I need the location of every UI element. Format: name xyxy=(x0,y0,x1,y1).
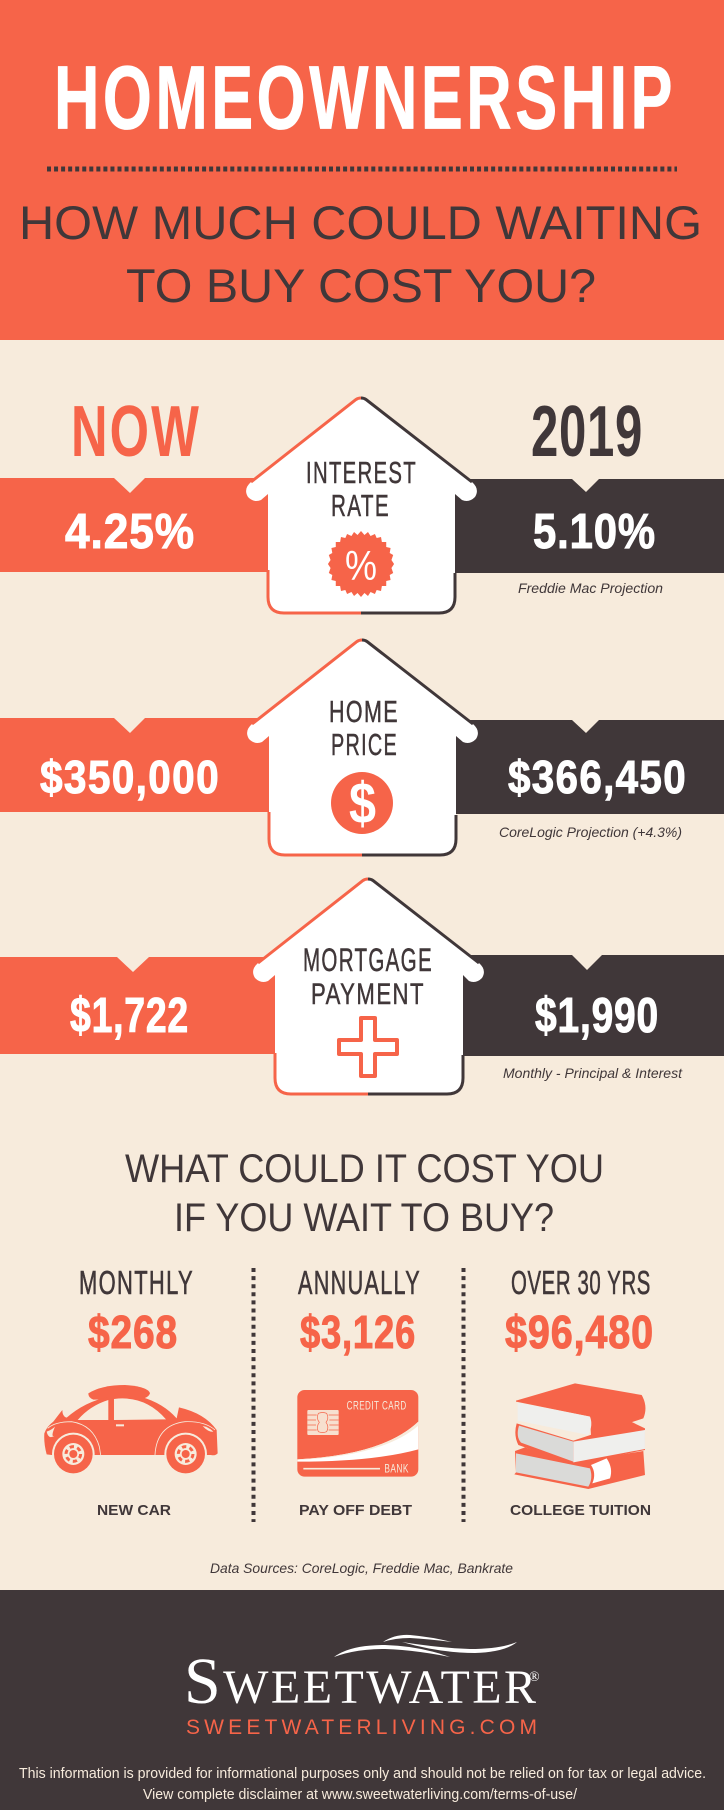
icon: books xyxy=(514,1383,645,1489)
column heading: MONTHLY xyxy=(79,1264,194,1301)
panel: over 30 years column xyxy=(505,1264,654,1519)
column heading: ANNUALLY xyxy=(298,1264,421,1301)
panel: mortgage payment row xyxy=(0,879,724,1094)
column amount: $268 xyxy=(88,1306,178,1358)
label: interest: INTEREST xyxy=(306,455,417,490)
disclaimer line 1: This information is provided for informational purposes only and should not be relied on for tax or legal advice. xyxy=(19,1766,706,1782)
panel: home price row xyxy=(0,640,724,855)
panel: monthly column xyxy=(44,1264,218,1519)
value: now price: $350,000 xyxy=(40,751,220,803)
note: freddie mac: Freddie Mac Projection xyxy=(518,580,663,596)
2019 band xyxy=(455,479,724,573)
house: home price xyxy=(247,640,478,855)
caption: NEW CAR xyxy=(97,1502,171,1519)
value: now rate: 4.25% xyxy=(65,505,195,559)
note: corelogic: CoreLogic Projection (+4.3%) xyxy=(499,824,682,840)
now band xyxy=(0,957,278,1054)
note: data sources: Data Sources: CoreLogic, Freddie Mac, Bankrate xyxy=(210,1560,513,1576)
2019 band xyxy=(455,720,724,814)
panel: footer xyxy=(0,1590,724,1810)
2019 band xyxy=(460,955,724,1056)
now band xyxy=(0,478,270,572)
label: payment: PAYMENT xyxy=(311,978,425,1011)
label: home: HOME xyxy=(329,694,399,729)
heading: now: NOW xyxy=(71,392,201,472)
website: SWEETWATERLIVING.COM xyxy=(186,1716,537,1739)
caption: PAY OFF DEBT xyxy=(299,1502,412,1519)
house: mortgage payment xyxy=(253,879,484,1094)
caption: COLLEGE TUITION xyxy=(510,1502,651,1519)
icon: credit card: CREDIT CARD xyxy=(347,1398,407,1412)
icon: percent badge: % xyxy=(345,542,377,589)
label: rate: RATE xyxy=(331,488,390,523)
note: monthly principal and interest: Monthly - Principal & Interest xyxy=(503,1065,683,1081)
panel: interest rate row xyxy=(0,398,724,613)
column amount: $96,480 xyxy=(505,1306,654,1358)
heading: cost question line 2: IF YOU WAIT TO BUY? xyxy=(174,1196,554,1240)
value: 2019 price: $366,450 xyxy=(508,751,687,803)
panel: annually column xyxy=(297,1264,421,1519)
registered mark: ® xyxy=(529,1670,540,1685)
value: 2019 rate: 5.10% xyxy=(533,505,656,559)
logo wordmark: SWEETWATER xyxy=(184,1645,536,1718)
disclaimer line 2: View complete disclaimer at www.sweetwaterliving.com/terms-of-use/ xyxy=(143,1787,578,1803)
subtitle line 2: TO BUY COST YOU? xyxy=(126,259,596,312)
icon: credit card: BANK xyxy=(384,1461,409,1475)
subtitle line 1: HOW MUCH COULD WAITING xyxy=(19,196,702,249)
heading: cost question line 1: WHAT COULD IT COST YOU xyxy=(125,1147,604,1191)
value: 2019 payment: $1,990 xyxy=(535,989,659,1043)
icon: credit card xyxy=(297,1390,418,1477)
house: interest rate xyxy=(246,398,477,613)
icon: plus xyxy=(339,1018,397,1076)
value: now payment: $1,722 xyxy=(70,989,189,1043)
now band xyxy=(0,718,270,812)
icon: dollar coin: $ xyxy=(349,771,376,836)
column amount: $3,126 xyxy=(300,1306,416,1358)
icon: dollar coin xyxy=(331,771,393,836)
icon: car xyxy=(44,1385,218,1475)
logo swoosh xyxy=(334,1635,517,1657)
panel: header xyxy=(0,0,724,340)
heading: 2019: 2019 xyxy=(531,392,643,472)
label: price: PRICE xyxy=(331,727,398,762)
icon: percent badge xyxy=(328,531,394,597)
label: mortgage: MORTGAGE xyxy=(303,942,433,978)
